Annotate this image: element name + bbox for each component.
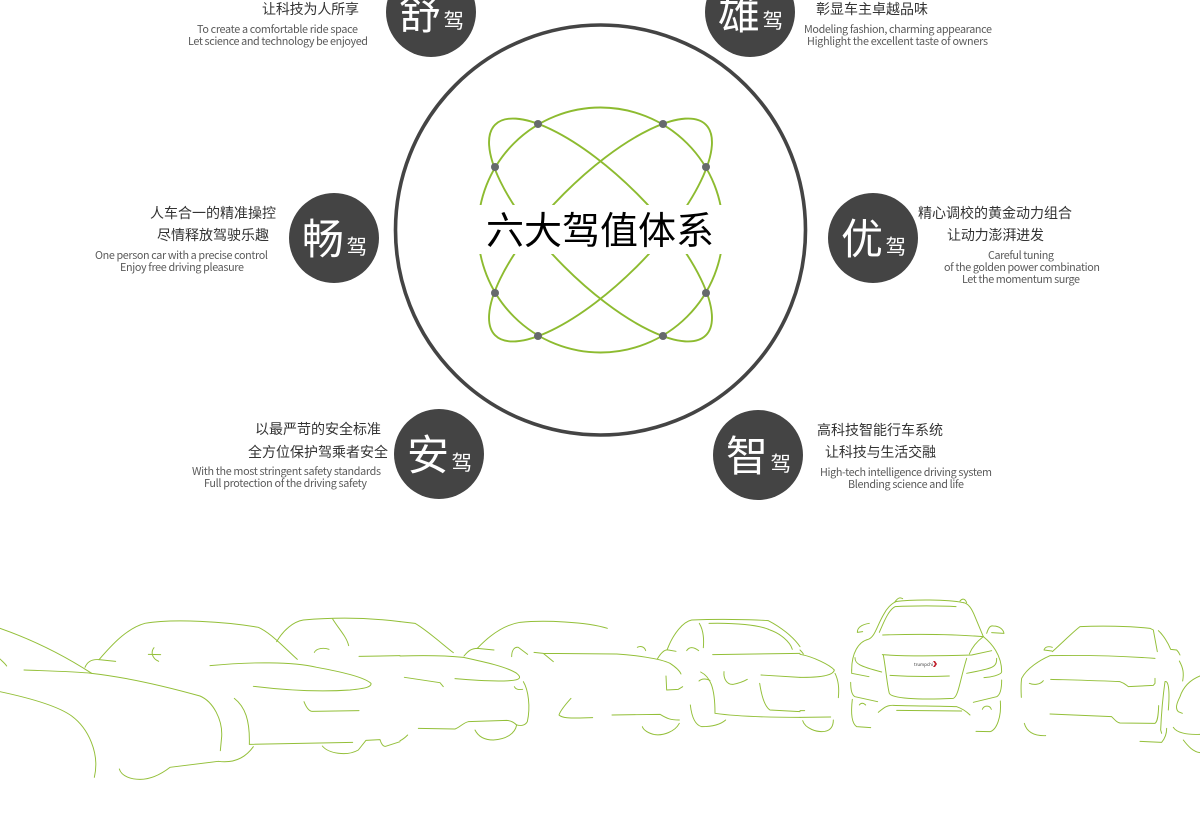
badge: 优驾: [828, 193, 918, 283]
text: 安驾: 以最严苛的安全标准: [255, 419, 381, 439]
car line art: middle section: [400, 619, 800, 741]
text: 优驾: 精心调校的黄金动力组合: [918, 203, 1072, 223]
badge: 畅驾: 驾: [346, 230, 367, 260]
badge: 畅驾: 畅: [302, 206, 344, 267]
text: 优驾: Let the momentum surge: [962, 271, 1080, 287]
text: 舒驾: Let science and technology be enjoyed: [188, 33, 368, 49]
text: 智驾: Blending science and life: [848, 476, 964, 492]
orbit emblem: [459, 88, 742, 372]
badge: 舒驾: 驾: [444, 4, 464, 34]
text: 雄驾: Highlight the excellent taste of owners: [807, 33, 988, 49]
text: 安驾: With the most stringent safety standards: [192, 463, 381, 479]
badge: 雄驾: 驾: [762, 4, 783, 34]
text: 智驾: 让科技与生活交融: [825, 442, 936, 462]
car line art: right section with front-view SUV: [800, 598, 1200, 753]
SUV grille logo: trumpchi: [914, 661, 933, 668]
central ring: [396, 25, 806, 435]
text: 畅驾: One person car with a precise control: [95, 247, 268, 263]
text: 安驾: 全方位保护驾乘者安全: [248, 442, 388, 462]
text: 雄驾: [804, 0, 992, 49]
badge: 优驾: 优: [841, 206, 883, 267]
text: 安驾: [192, 419, 388, 491]
text: 畅驾: 人车合一的精准操控: [150, 203, 276, 223]
badge: 智驾: 驾: [770, 447, 791, 477]
text: 优驾: 让动力澎湃进发: [947, 225, 1044, 245]
text: 雄驾: Modeling fashion, charming appearance: [804, 21, 992, 37]
badge: 安驾: 安: [407, 422, 449, 483]
text: 安驾: Full protection of the driving safety: [204, 475, 367, 491]
badge: 优驾: 驾: [886, 230, 906, 260]
text: 优驾: Careful tuning: [988, 247, 1054, 263]
badge: 舒驾: [386, 0, 476, 57]
car line art: left section: [0, 618, 400, 779]
badge: 安驾: [394, 409, 484, 499]
badge: 智驾: 智: [726, 423, 768, 484]
badge: 智驾: [713, 410, 803, 500]
text: 智驾: [817, 420, 992, 492]
text: 舒驾: To create a comfortable ride space: [197, 21, 358, 37]
text: 智驾: High-tech intelligence driving system: [820, 464, 992, 480]
badge: 畅驾: [289, 193, 379, 283]
text: 畅驾: 尽情释放驾驶乐趣: [157, 225, 269, 245]
text: 智驾: 高科技智能行车系统: [817, 420, 943, 440]
text: 畅驾: Enjoy free driving pleasure: [120, 259, 244, 275]
badge: 雄驾: [705, 0, 795, 57]
badge: 安驾: 驾: [452, 446, 472, 476]
text: 优驾: [918, 203, 1100, 287]
text: 优驾: of the golden power combination: [944, 259, 1100, 275]
text: 舒驾: [188, 0, 368, 49]
central title: 六大驾值体系: [486, 200, 714, 255]
text: 畅驾: [95, 203, 276, 275]
